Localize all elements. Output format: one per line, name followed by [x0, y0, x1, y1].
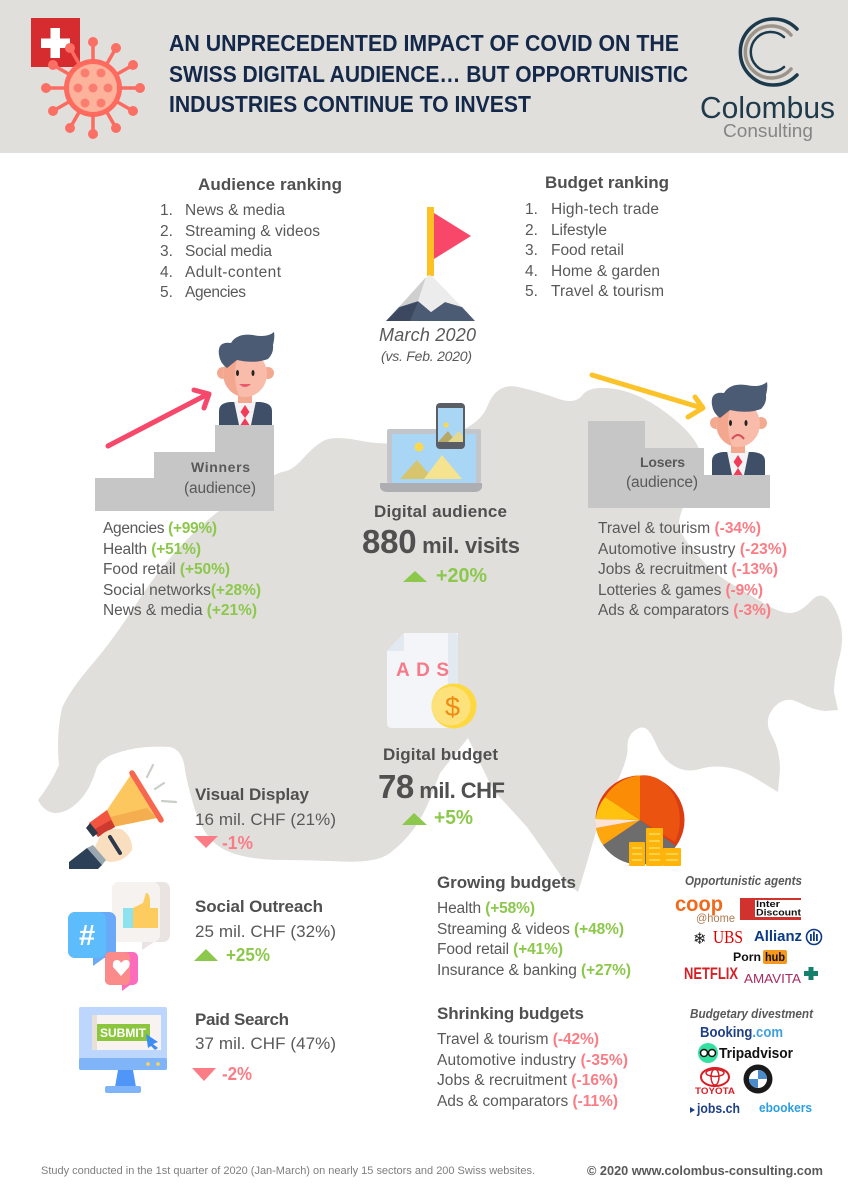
icon: flag on mountain — [386, 207, 475, 321]
panel: growing budgets: Food retail (+41%) — [437, 941, 563, 958]
date label: March 2020 — [379, 325, 476, 345]
panel: audience ranking: News & media — [185, 202, 285, 219]
logo: Colombus Consulting — [700, 19, 835, 141]
icon: pie chart with coins — [595, 775, 684, 866]
heading: Digital budget — [383, 745, 498, 764]
panel: digital budget — [378, 633, 505, 829]
logo: Inter Discount: Discount — [756, 908, 801, 918]
panel: budget ranking: 5. — [525, 283, 538, 300]
losers podium — [588, 421, 770, 508]
icon: ads document and coin: $ — [445, 692, 460, 722]
panel: opportunistic agents logos: Opportunistic agents — [685, 873, 802, 888]
panel: audience ranking: Streaming & videos — [185, 223, 320, 240]
title: INDUSTRIES CONTINUE TO INVEST — [169, 91, 531, 117]
icon: ads document and coin — [387, 633, 476, 728]
trend: -1% — [194, 833, 253, 853]
panel: losers — [588, 375, 787, 619]
logo: coop@home: @home — [696, 911, 735, 925]
panel: growing budgets: Insurance & banking (+27%) — [437, 962, 631, 979]
logo: coop@home: coop — [675, 893, 723, 916]
icon: social bubbles: # — [79, 920, 95, 952]
logo: BMW — [744, 1064, 772, 1094]
icon: happy man — [217, 332, 274, 425]
text: paid search: Paid Search — [195, 1010, 289, 1029]
icon: ads document and coin: ADS — [396, 660, 449, 681]
winners label: (audience) — [184, 480, 256, 497]
text: visual display: Visual Display — [195, 785, 310, 804]
title — [169, 30, 688, 117]
panel: shrinking budgets: Shrinking budgets — [437, 1004, 584, 1023]
panel: budget ranking — [525, 173, 669, 300]
losers label: Losers — [640, 454, 685, 470]
title: SWISS DIGITAL AUDIENCE… BUT OPPORTUNISTIC — [169, 61, 688, 87]
icon: laptop and phone — [380, 403, 482, 492]
icon: sad man — [710, 382, 767, 475]
logo: Inter Discount: Inter — [756, 899, 781, 909]
panel: visual display: 16 mil. CHF (21%) — [195, 810, 336, 829]
logo: Amavita: AMAVITA — [744, 971, 801, 986]
trend: +20% — [403, 565, 487, 587]
panel: digital audience — [362, 403, 520, 587]
losers list: Automotive insustry (-23%) — [598, 541, 787, 558]
icon: monitor submit — [79, 1007, 167, 1093]
panel: audience ranking: Social media — [185, 243, 272, 260]
arrow: down — [592, 375, 703, 417]
logo: Pornhub: Porn — [733, 950, 761, 964]
logo: UBS: UBS — [713, 927, 743, 947]
header band — [0, 0, 848, 153]
panel: shrinking budgets — [437, 1004, 628, 1110]
panel: social outreach — [68, 882, 336, 991]
metric: visits: 880 mil. visits — [362, 523, 520, 560]
footer copyright: © 2020 www.colombus-consulting.com — [587, 1163, 823, 1178]
trend: +25%: +25% — [226, 945, 270, 965]
panel: budget ranking: Home & garden — [551, 263, 660, 280]
panel: growing budgets: Growing budgets — [437, 873, 576, 892]
panel: budget ranking: High-tech trade — [551, 201, 659, 218]
panel: audience ranking: Adult-content — [185, 264, 282, 281]
trend: -1%: -1% — [222, 833, 253, 853]
panel: growing budgets — [437, 873, 631, 979]
swiss map background — [38, 386, 842, 892]
logo: Booking.com: Booking.com — [700, 1024, 783, 1041]
losers list: Jobs & recruitment (-13%) — [598, 561, 778, 578]
logo: Colombus Consulting: Consulting — [723, 121, 813, 141]
winners label — [184, 459, 256, 497]
panel: budget ranking: Lifestyle — [551, 222, 607, 239]
icon: monitor submit: SUBMIT — [100, 1026, 147, 1040]
panel: budget ranking: 4. — [525, 263, 538, 280]
logo: Netflix: NETFLIX — [684, 964, 738, 983]
panel: budget ranking: 1. — [525, 201, 538, 218]
metric: budget: 78 mil. CHF — [378, 768, 505, 805]
trend: -2% — [192, 1064, 252, 1084]
panel: budget ranking: Food retail — [551, 242, 624, 259]
panel: shrinking budgets: Jobs & recruitment (-16%) — [437, 1072, 618, 1089]
losers label: (audience) — [626, 474, 698, 491]
trend: -2%: -2% — [222, 1064, 252, 1084]
logo: ebookers: ebookers — [759, 1100, 812, 1115]
logo: UBS: ❄ — [693, 931, 706, 948]
panel: budgetary divestment logos: Budgetary divestment — [690, 1006, 814, 1021]
winners list — [103, 520, 261, 619]
panel: winners — [95, 332, 274, 619]
losers list — [598, 520, 787, 619]
arrow: up — [108, 390, 209, 446]
panel: budget ranking: 3. — [525, 242, 538, 259]
panel: audience ranking: Audience ranking — [198, 175, 342, 194]
panel: shrinking budgets: Automotive industry (-35%) — [437, 1052, 628, 1069]
panel: budgetary divestment logos — [690, 1006, 814, 1116]
logo: UBS — [693, 927, 743, 948]
winners list: News & media (+21%) — [103, 602, 257, 619]
trend: +25% — [194, 945, 270, 965]
losers list: Lotteries & games (-9%) — [598, 582, 763, 599]
date label — [379, 325, 476, 364]
losers list: Travel & tourism (-34%) — [598, 520, 761, 537]
logo: Pornhub — [733, 950, 787, 964]
logo: Colombus Consulting: Colombus — [700, 90, 835, 125]
panel: growing budgets: Streaming & videos (+48%) — [437, 921, 624, 938]
icon: swiss flag — [31, 18, 80, 67]
panel: paid search: 37 mil. CHF (47%) — [195, 1034, 336, 1053]
panel: opportunistic agents logos — [675, 873, 822, 986]
text: social outreach: Social Outreach — [195, 897, 323, 916]
panel: budget ranking: Budget ranking — [545, 173, 669, 192]
footer note: Study conducted in the 1st quarter of 2020 (Jan-March) on nearly 15 sectors and 200 Swiss websites. — [41, 1165, 535, 1177]
panel: audience ranking: 3. — [160, 243, 173, 260]
losers label — [626, 454, 698, 491]
winners list: Food retail (+50%) — [103, 561, 230, 578]
winners list: Health (+51%) — [103, 541, 201, 558]
panel: audience ranking — [160, 175, 342, 301]
icon: social bubbles — [68, 882, 170, 991]
panel: budget ranking: 2. — [525, 222, 538, 239]
winners list: Social networks(+28%) — [103, 582, 261, 599]
panel: audience ranking: 2. — [160, 223, 173, 240]
panel: growing budgets: Health (+58%) — [437, 900, 535, 917]
panel: visual display — [69, 765, 336, 869]
trend: +5%: +5% — [434, 807, 473, 829]
trend: +5% — [402, 807, 473, 829]
logo: jobs.ch: jobs.ch — [696, 1100, 740, 1116]
icon: virus — [41, 37, 145, 139]
panel: shrinking budgets: Travel & tourism (-42%) — [437, 1031, 599, 1048]
losers list: Ads & comparators (-3%) — [598, 602, 771, 619]
panel: shrinking budgets: Ads & comparators (-11%) — [437, 1093, 618, 1110]
logo: Pornhub: hub — [765, 950, 785, 964]
panel: paid search — [79, 1007, 336, 1093]
trend: +20%: +20% — [436, 565, 487, 587]
panel: audience ranking: 4. — [160, 264, 173, 281]
icon: megaphone — [69, 765, 176, 869]
panel: social outreach: 25 mil. CHF (32%) — [195, 922, 336, 941]
panel: audience ranking: 1. — [160, 202, 173, 219]
logo: coop@home — [675, 893, 735, 925]
title: AN UNPRECEDENTED IMPACT OF COVID ON THE — [169, 30, 679, 56]
logo: Toyota: TOYOTA — [695, 1086, 735, 1097]
winners list: Agencies (+99%) — [103, 520, 217, 537]
winners podium — [95, 425, 274, 511]
logo: Inter Discount — [740, 898, 801, 920]
panel: audience ranking: Agencies — [185, 284, 246, 301]
logo: Amavita — [744, 967, 818, 986]
winners label: Winners — [191, 459, 250, 475]
panel: budget ranking: Travel & tourism — [551, 283, 664, 300]
logo: Tripadvisor: Tripadvisor — [719, 1045, 793, 1062]
panel: audience ranking: 5. — [160, 284, 173, 301]
date label: (vs. Feb. 2020) — [381, 348, 472, 364]
logo: Allianz: Allianz — [754, 928, 802, 945]
heading: Digital audience — [374, 502, 507, 521]
